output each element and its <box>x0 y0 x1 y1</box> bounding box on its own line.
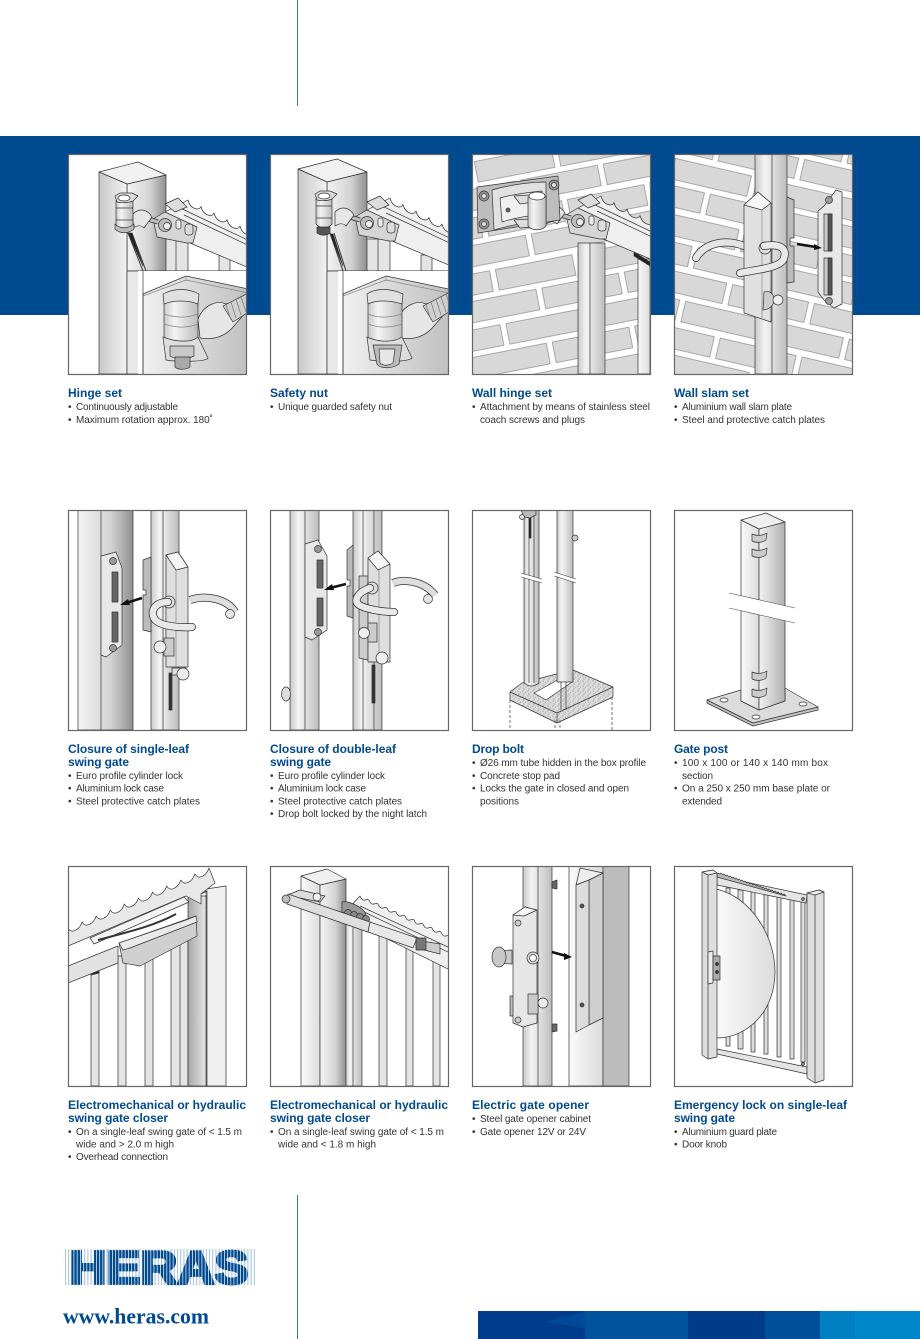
bullets: Overhead connection <box>76 1152 168 1163</box>
card: gate post <box>674 510 852 808</box>
frame <box>472 866 650 1086</box>
heading: swing gate closer <box>270 1111 370 1125</box>
bullets: Drop bolt locked by the night latch <box>278 809 427 820</box>
frame <box>68 866 246 1086</box>
bullets: 100 x 100 or 140 x 140 mm box <box>682 758 828 769</box>
bullets: • <box>68 415 72 426</box>
card: wall slam set <box>674 154 852 426</box>
frame <box>674 154 852 374</box>
arrow <box>797 244 816 247</box>
top binding line <box>297 0 298 106</box>
illustration: drop bolt <box>510 511 614 730</box>
heading: Wall hinge set <box>472 386 552 400</box>
heading: swing gate <box>674 1111 735 1125</box>
heading: Closure of single-leaf <box>68 742 190 756</box>
frame <box>270 154 448 374</box>
bullets: Unique guarded safety nut <box>278 402 392 413</box>
bullets: • <box>68 784 72 794</box>
illustration: safety nut <box>271 155 448 374</box>
card: safety nut <box>270 154 458 413</box>
bullets: • <box>68 402 72 413</box>
heading: Hinge set <box>68 386 122 400</box>
bullets: • <box>68 796 72 808</box>
illustration: emergency lock gate <box>702 870 824 1084</box>
frame <box>674 510 852 730</box>
bullets: wide and < 1.8 m high <box>277 1140 376 1150</box>
footer colour bar <box>478 1311 920 1339</box>
card: emergency lock <box>674 866 852 1150</box>
bullets: On a single-leaf swing gate of < 1.5 m <box>76 1127 242 1138</box>
illustration: wall hinge set <box>473 155 650 374</box>
illustration: double-leaf closure <box>281 511 438 730</box>
bullets: • <box>270 784 274 794</box>
illustration: single-leaf closure <box>78 511 238 730</box>
card: hinge set <box>68 154 258 426</box>
heading: swing gate closer <box>68 1111 168 1125</box>
break marks <box>521 574 576 581</box>
heading: Electromechanical or hydraulic <box>270 1098 448 1112</box>
heading: Electromechanical or hydraulic <box>68 1098 246 1112</box>
illustration: wall slam set <box>675 155 852 374</box>
bullets: positions <box>480 796 519 808</box>
bullets: • <box>472 1114 476 1125</box>
bullets: • <box>270 809 274 820</box>
illustration: electric gate opener <box>492 867 630 1086</box>
heading: swing gate <box>68 755 129 769</box>
illustration: gate post <box>706 512 818 726</box>
frame <box>472 510 650 730</box>
bullets: • <box>472 771 476 782</box>
heading: Safety nut <box>270 386 328 400</box>
heading: Wall slam set <box>674 386 749 400</box>
bullets: • <box>472 1127 476 1138</box>
bullets: Euro profile cylinder lock <box>278 771 386 782</box>
bullets: section <box>682 771 713 782</box>
arrow <box>552 952 566 956</box>
bullets: • <box>270 402 274 413</box>
bullets: Locks the gate in closed and open <box>480 784 629 794</box>
bullets: Concrete stop pad <box>480 771 560 782</box>
frame <box>68 510 246 730</box>
bullets: Aluminium wall slam plate <box>682 402 792 413</box>
arrow <box>330 584 346 588</box>
bullets: Ø26 mm tube hidden in the box profile <box>480 758 646 769</box>
card: wall hinge set <box>472 154 667 426</box>
bullets: • <box>472 402 476 413</box>
bullets: Steel and protective catch plates <box>682 415 825 426</box>
bullets: • <box>68 1127 72 1138</box>
card: closer overhead <box>68 866 246 1163</box>
bullets: Steel gate opener cabinet <box>480 1114 591 1125</box>
bullets: Maximum rotation approx. 180˚ <box>76 414 213 426</box>
frame <box>270 866 448 1086</box>
bullets: Steel protective catch plates <box>278 796 402 808</box>
card: closure of double-leaf swing gate <box>270 510 448 820</box>
illustration: hinge set <box>69 155 246 374</box>
card: closure of single-leaf swing gate <box>68 510 246 808</box>
bullets: • <box>68 1152 72 1163</box>
illustration: overhead closer <box>69 868 226 1086</box>
bullets: Gate opener 12V or 24V <box>480 1127 586 1138</box>
bullets: Door knob <box>682 1140 727 1150</box>
dashed guide lines <box>510 697 612 730</box>
arrow <box>126 598 142 603</box>
blue band <box>0 136 920 315</box>
logo: HERAS: HERAS <box>70 1242 248 1294</box>
bottom binding line <box>297 1195 298 1339</box>
bullets: Aluminium guard plate <box>682 1127 777 1138</box>
frame <box>68 154 246 374</box>
frame <box>472 154 650 374</box>
bullets: Aluminium lock case <box>278 784 366 794</box>
bullets: Euro profile cylinder lock <box>76 771 184 782</box>
heading: Emergency lock on single-leaf <box>674 1098 848 1112</box>
bullets: • <box>472 784 476 794</box>
heading: Electric gate opener <box>472 1098 589 1112</box>
bullets: Continuously adjustable <box>76 402 178 413</box>
bullets: On a 250 x 250 mm base plate or <box>682 784 831 794</box>
bullets: wide and > 2.0 m high <box>75 1140 174 1150</box>
bullets: • <box>674 415 678 426</box>
bullets: • <box>270 771 274 782</box>
bullets: • <box>472 758 476 769</box>
website: www.heras.com <box>63 1304 209 1328</box>
card: electric gate opener <box>472 866 650 1138</box>
bullets: On a single-leaf swing gate of < 1.5 m <box>278 1127 444 1138</box>
bullets: Steel protective catch plates <box>76 796 200 808</box>
heading: swing gate <box>270 755 331 769</box>
heading: Drop bolt <box>472 742 524 756</box>
bullets: • <box>674 758 678 769</box>
illustration: post-mounted closer <box>282 868 448 1086</box>
bullets: coach screws and plugs <box>480 415 585 426</box>
bullets: Attachment by means of stainless steel <box>480 402 650 413</box>
bullets: extended <box>682 796 722 808</box>
heading: Gate post <box>674 742 728 756</box>
bullets: • <box>674 1127 678 1138</box>
heading: Closure of double-leaf <box>270 742 397 756</box>
bullets: • <box>674 1140 678 1150</box>
frame <box>674 866 852 1086</box>
frame <box>270 510 448 730</box>
card: drop bolt <box>472 510 650 808</box>
bullets: Aluminium lock case <box>76 784 164 794</box>
post break <box>729 593 795 623</box>
bullets: • <box>674 784 678 794</box>
bullets: • <box>270 796 274 808</box>
bullets: • <box>270 1127 274 1138</box>
bullets: • <box>674 402 678 413</box>
card: closer on post <box>270 866 450 1150</box>
bullets: • <box>68 771 72 782</box>
